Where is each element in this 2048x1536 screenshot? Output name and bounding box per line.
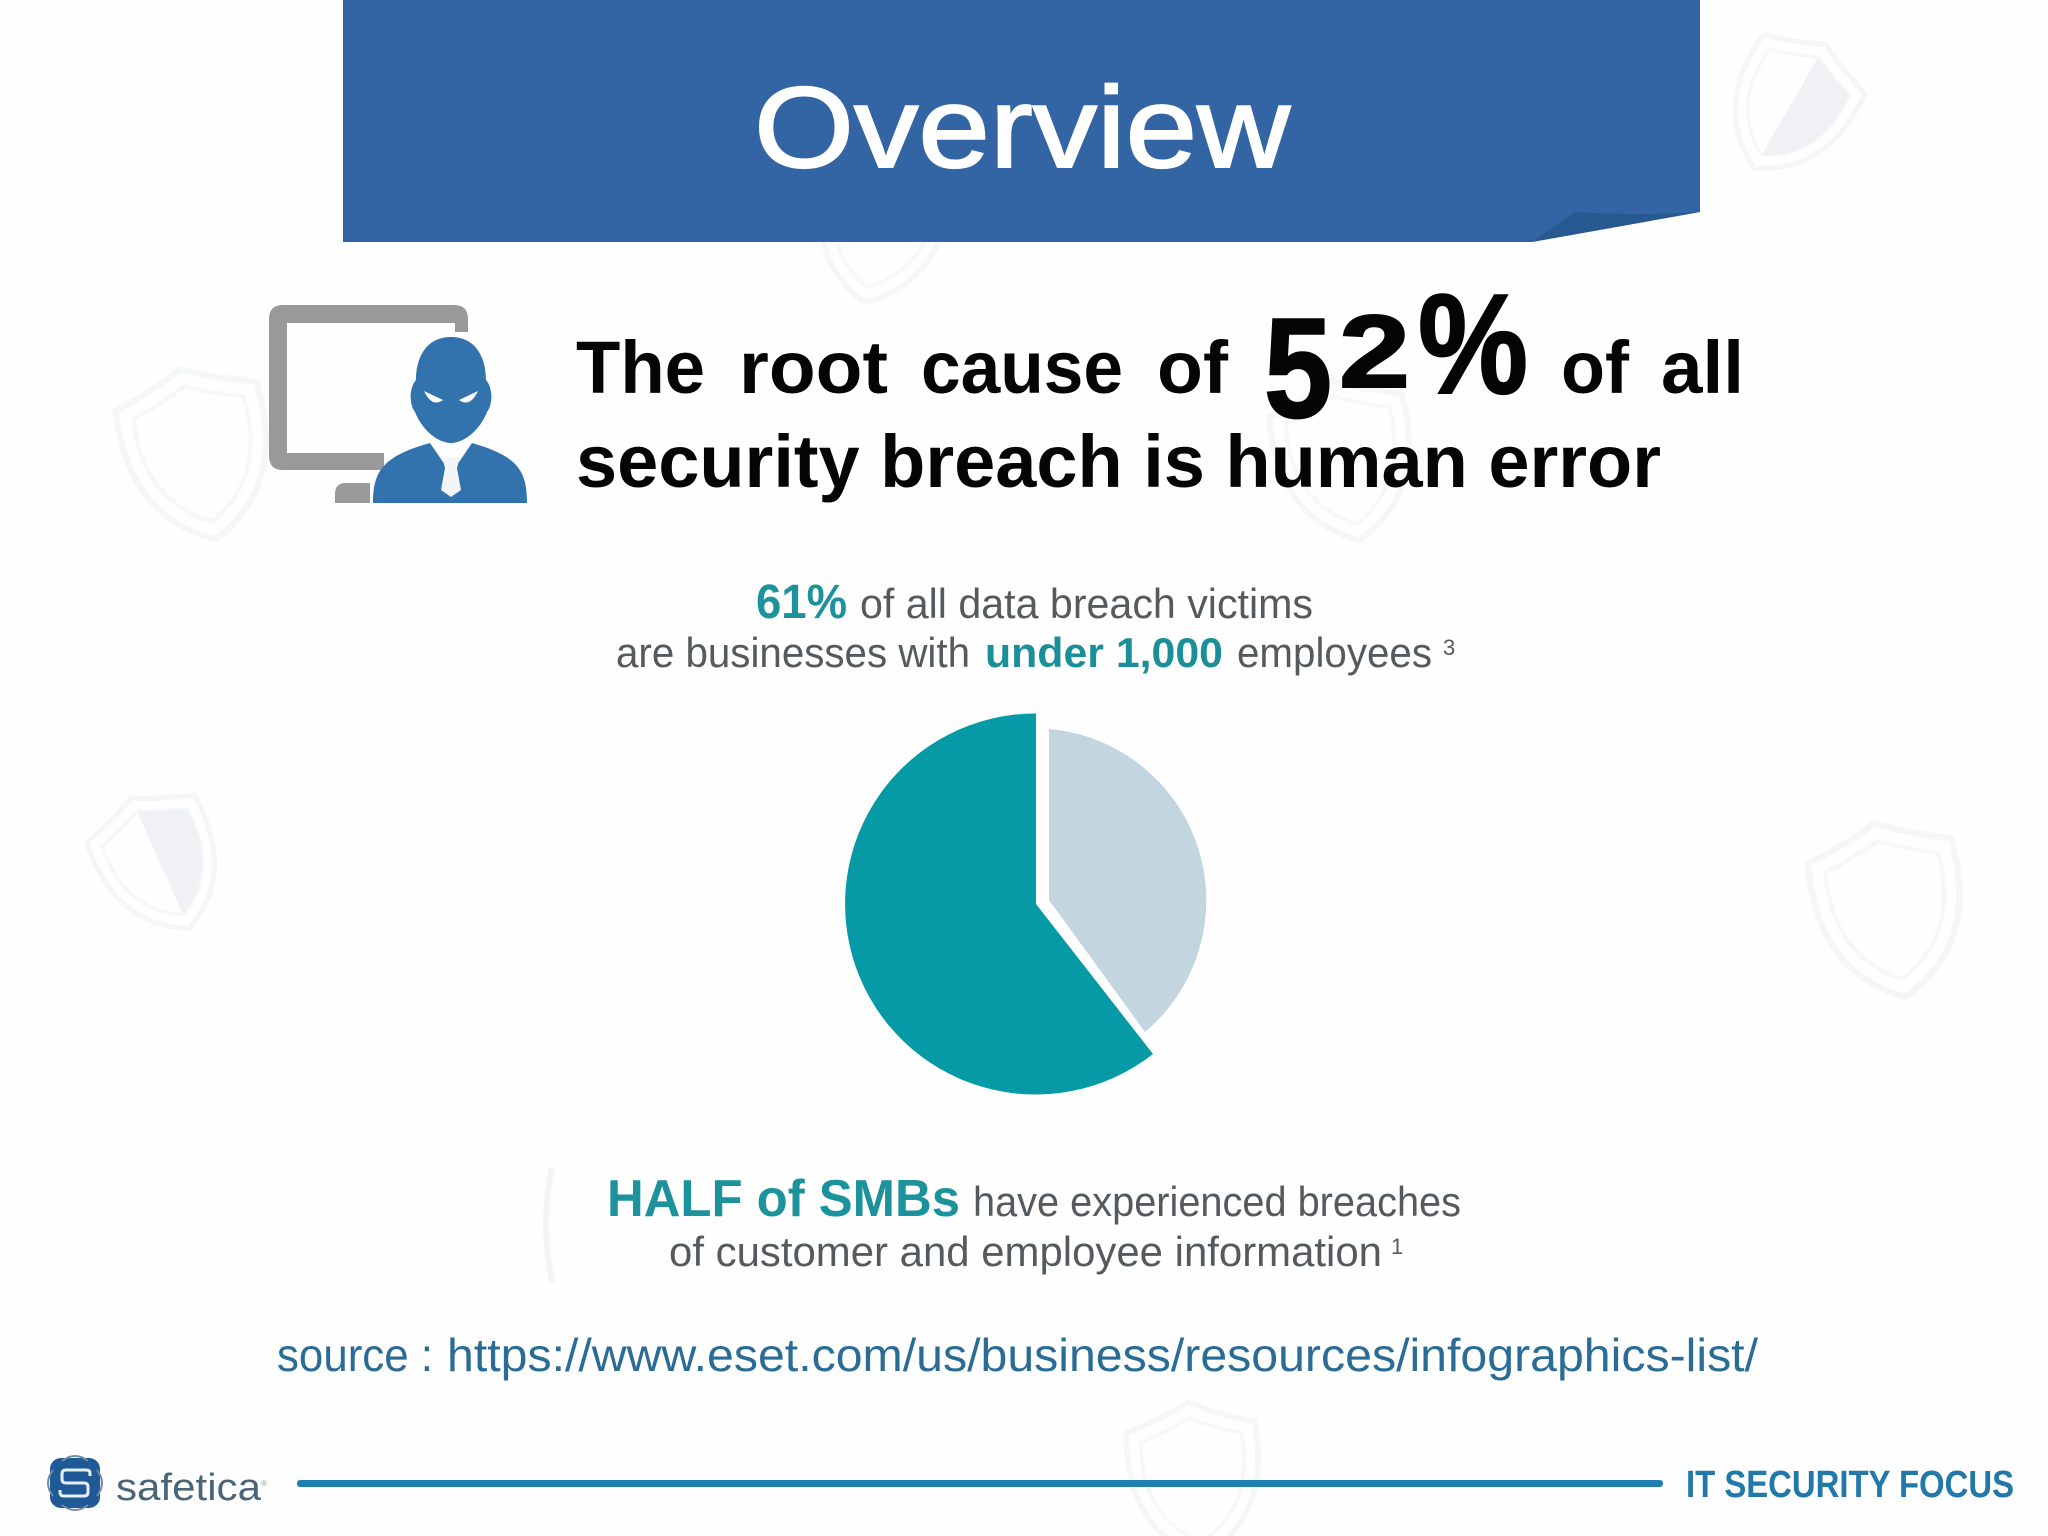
monitor stand xyxy=(335,483,370,503)
pie caption: under 1,000 xyxy=(985,629,1223,676)
SMB caption: have experienced breaches xyxy=(973,1178,1461,1225)
suit body xyxy=(373,443,527,503)
pie chart xyxy=(845,713,1206,1094)
header banner xyxy=(343,0,1700,242)
SMB caption: 1 xyxy=(1391,1234,1403,1259)
SMB caption: of customer and employee information xyxy=(669,1228,1382,1275)
52 percent highlight: 5 xyxy=(1264,289,1332,448)
pie caption: of all data breach victims xyxy=(860,580,1313,627)
footer xyxy=(48,1455,2014,1510)
52 percent highlight xyxy=(1264,265,1528,448)
headline: security breach is human error xyxy=(576,420,1661,503)
safetica logo: ® xyxy=(261,1479,267,1488)
banner fold xyxy=(1532,212,1700,242)
headline: The xyxy=(576,326,705,409)
icon: hacker at monitor xyxy=(269,305,527,503)
headline: all xyxy=(1661,326,1744,409)
headline xyxy=(576,265,1744,503)
slice: 61 percent xyxy=(845,713,1153,1094)
headline: cause xyxy=(921,326,1123,409)
monitor xyxy=(269,305,468,470)
safetica logo: safetica xyxy=(116,1467,262,1509)
safetica logo xyxy=(48,1455,267,1510)
pie caption xyxy=(616,576,1455,676)
hooded head xyxy=(411,337,491,443)
eyes xyxy=(424,391,478,403)
pie caption: 3 xyxy=(1443,635,1455,660)
headline: of xyxy=(1561,326,1629,409)
headline: root xyxy=(739,326,888,409)
source link: https://www.eset.com/us/business/resources/infographics-list/ xyxy=(447,1329,1758,1381)
52 percent highlight: 2 xyxy=(1339,294,1410,409)
source link: source : xyxy=(277,1329,433,1381)
pie caption: are businesses with xyxy=(616,629,970,676)
52 percent highlight: % xyxy=(1418,265,1528,424)
title: Overview xyxy=(754,64,1291,192)
slice: 39 percent xyxy=(1049,729,1206,1032)
SMB caption xyxy=(607,1170,1461,1275)
headline: of xyxy=(1157,326,1228,409)
pie caption: 61% xyxy=(756,576,847,629)
pie caption: employees xyxy=(1237,629,1432,676)
tie xyxy=(441,457,461,497)
footer rule xyxy=(297,1480,1663,1487)
SMB caption: HALF of SMBs xyxy=(607,1170,960,1228)
